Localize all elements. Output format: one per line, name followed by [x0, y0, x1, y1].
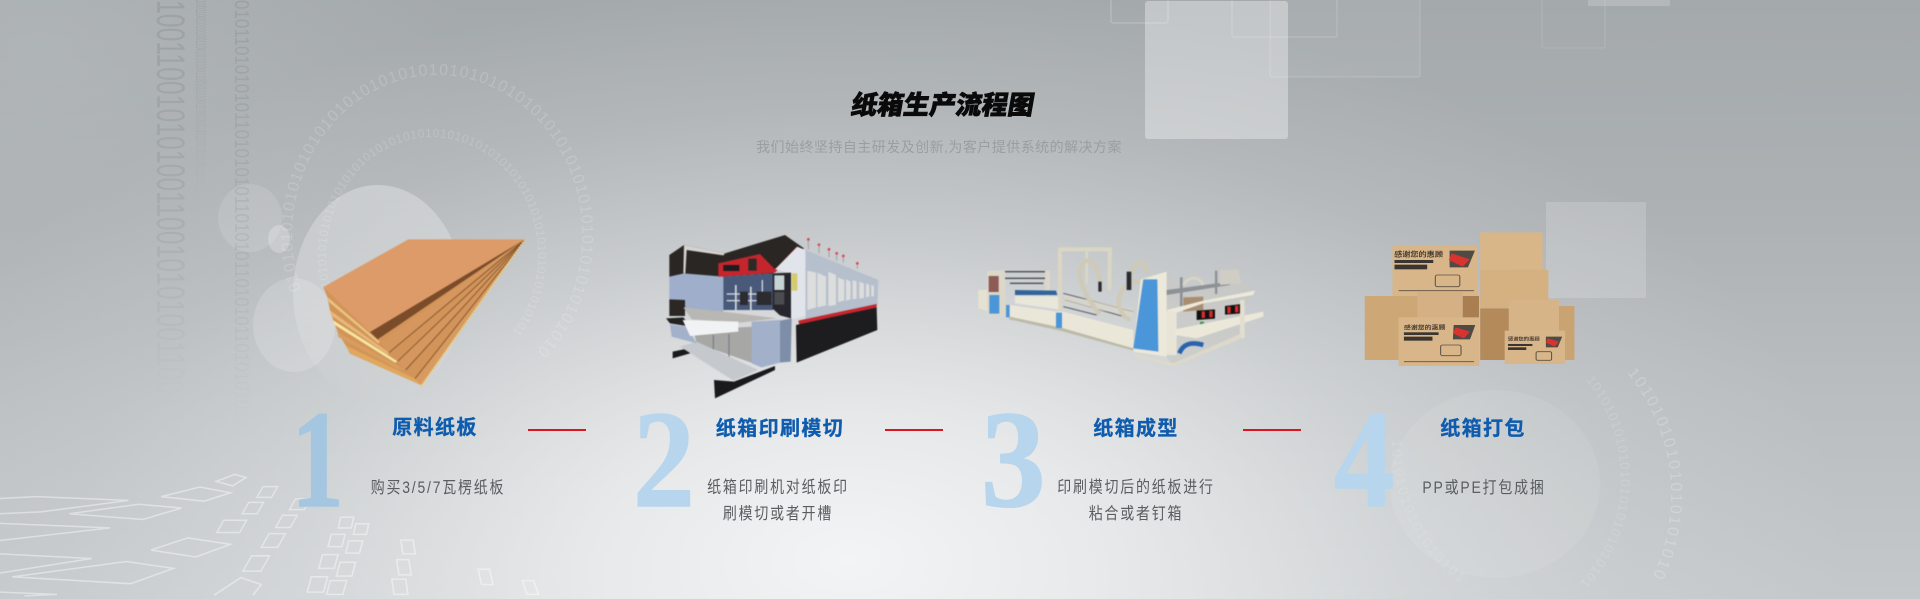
step 3: description: [1057, 478, 1215, 523]
connector line 1: [528, 429, 586, 431]
step 1: heading: 原料纸板: [392, 417, 478, 439]
binary rings: 1010101010101010101010101010101010: [1587, 376, 1630, 492]
step 1: description: 购买3/5/7瓦楞纸板: [371, 480, 505, 497]
number 3: 3: [981, 383, 1046, 537]
vertical binary columns: [147, 0, 253, 438]
step 3: description: 印刷模切后的纸板进行: [1057, 479, 1215, 497]
step 3: description: 粘合或者钉箱: [1089, 505, 1183, 523]
step 2: description: [707, 478, 849, 523]
step 4: heading: 纸箱打包: [1440, 418, 1526, 440]
binary rings: 101010101010101010101010: [0, 0, 1470, 586]
number 2: 2: [633, 383, 695, 537]
subtitle: 我们始终坚持自主研发及创新,为客户提供系统的解决方案: [756, 139, 1122, 155]
wireframe shapes bottom left: [0, 474, 538, 596]
vertical binary columns: 01011010101011010101011010101101010110101010101: [231, 0, 253, 438]
step 4 illustration: stacked cartons: 感谢您的惠顾: [1404, 323, 1446, 331]
number 1: 1: [291, 382, 344, 536]
step 2: description: 纸箱印刷机对纸板印: [707, 479, 849, 497]
step 2: heading: 纸箱印刷模切: [716, 418, 844, 440]
step 4 illustration: stacked cartons: 感谢您的惠顾: [1394, 250, 1444, 258]
step 4 illustration: stacked cartons: 感谢您的惠顾: [1508, 336, 1540, 342]
number 4: 4: [1334, 383, 1394, 537]
translucent rectangles top right: [1111, 0, 1670, 298]
title: 纸箱生产流程图: [849, 90, 1037, 120]
step 4: description: PP或PE打包成捆: [1422, 480, 1546, 497]
connector line 3: [1243, 429, 1301, 431]
vertical binary columns: 100110010101001100101010011001: [147, 0, 192, 408]
ghost blobs: [218, 184, 1600, 578]
binary rings: 10101010101010101010101010: [1628, 368, 1682, 579]
vertical binary columns: 100110010101001100101010011001010100110010101001100101010011001011001100: [192, 0, 208, 207]
step 2: description: 刷模切或者开槽: [723, 505, 833, 523]
connector line 2: [885, 429, 943, 431]
step 3: heading: 纸箱成型: [1093, 418, 1179, 440]
